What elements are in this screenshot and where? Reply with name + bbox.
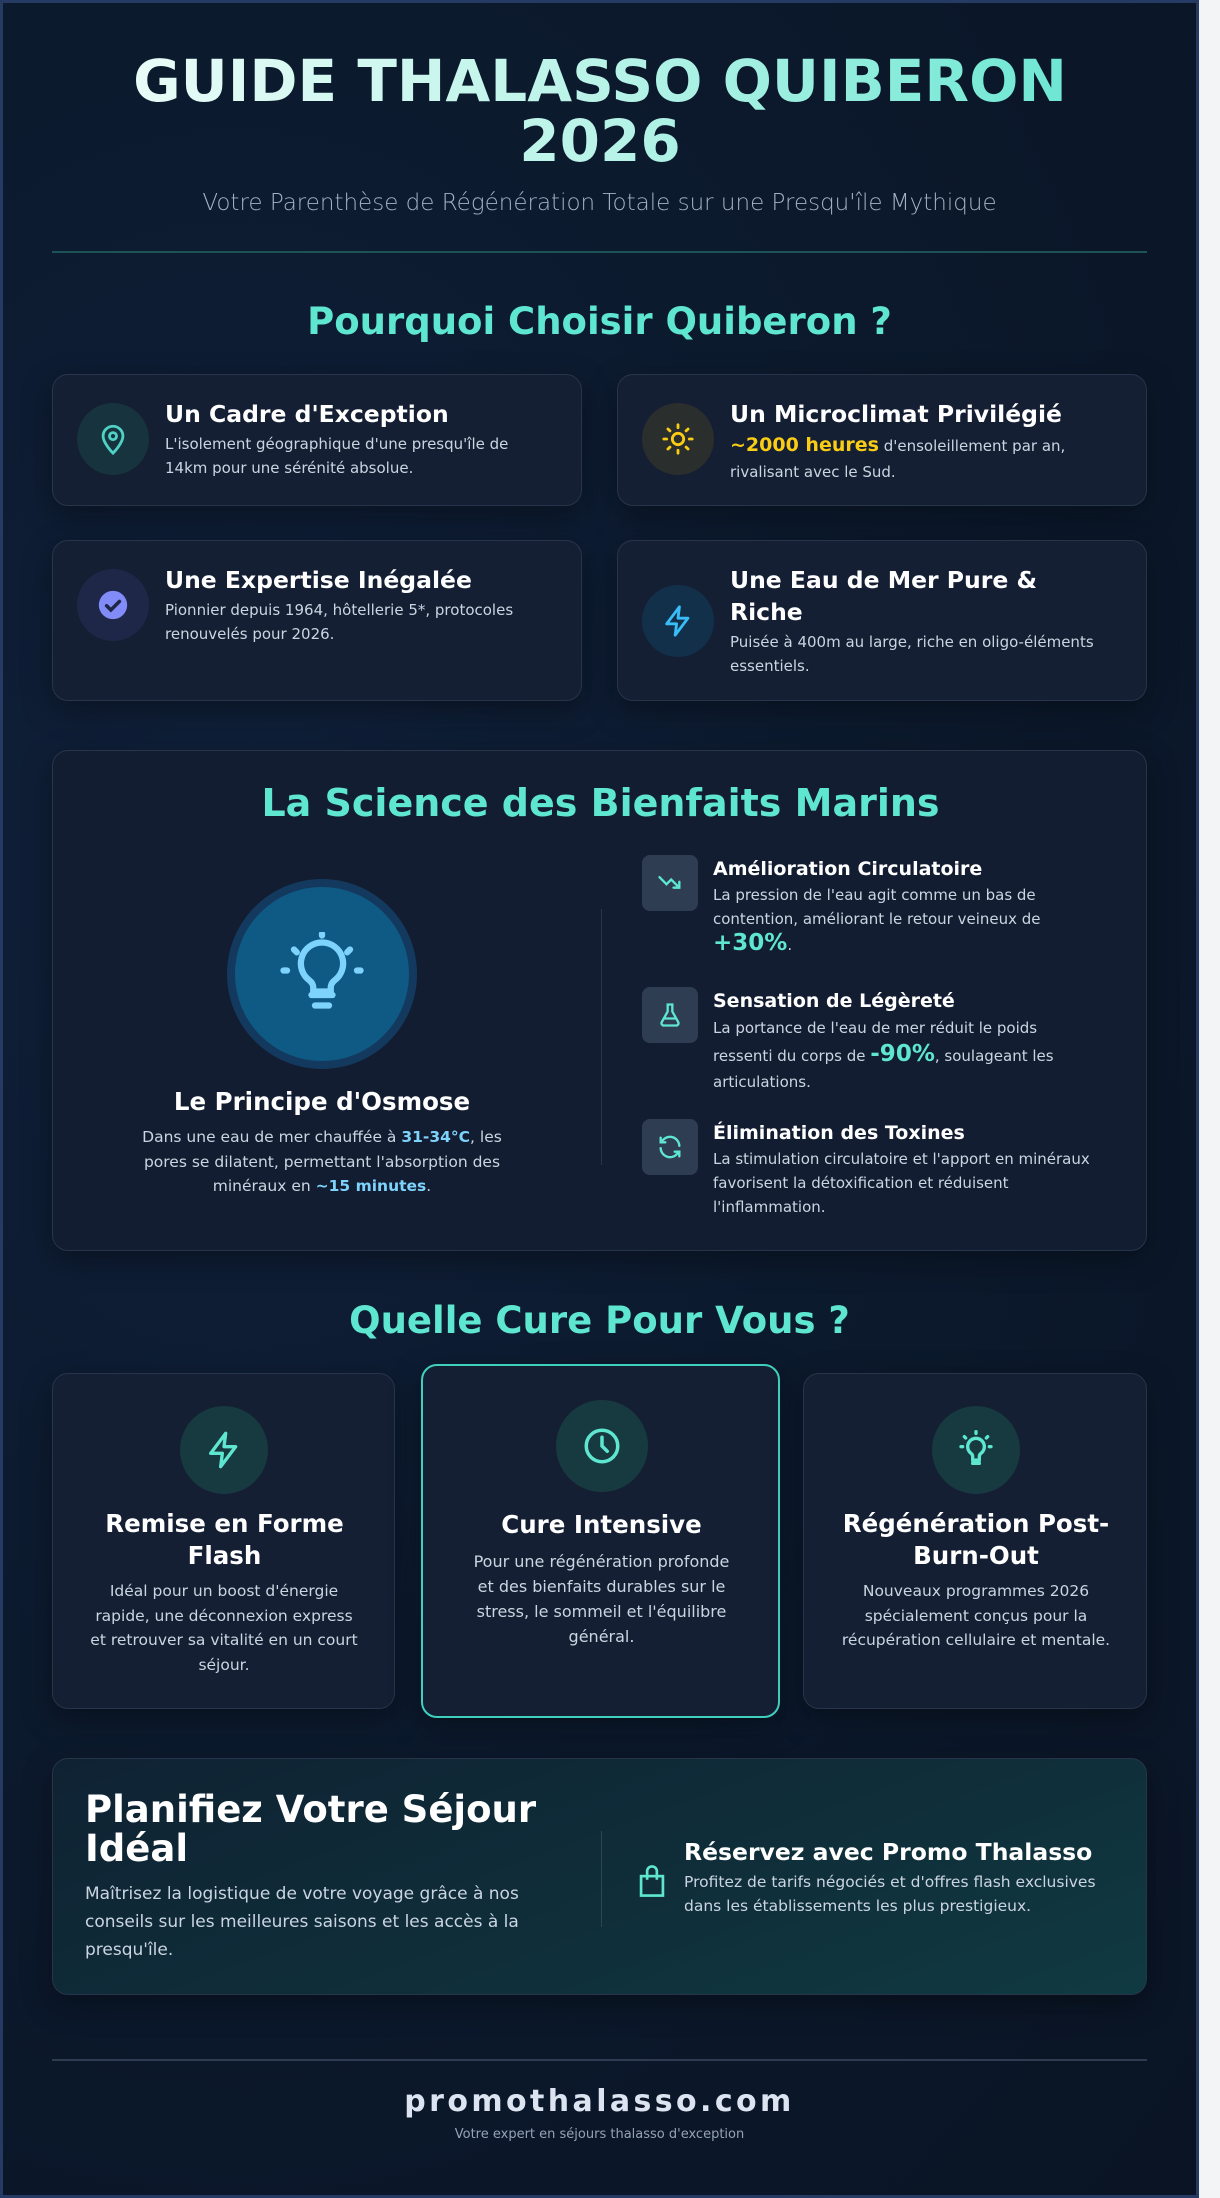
card: flash [52, 1373, 395, 1709]
icon: bulb [932, 1406, 1020, 1494]
title [60, 51, 1140, 171]
cta right: Réservez avec Promo Thalasso [684, 1838, 1092, 1866]
card: intensive [421, 1364, 780, 1718]
card: expertise [52, 540, 582, 701]
icon: sun [642, 403, 714, 475]
item: legerete: La portance de l'eau de mer réduit le poids ressenti du corps de -90%, soulageant les articulations. [713, 1019, 1054, 1091]
cta right: Profitez de tarifs négociés et d'offres flash exclusives dans les établissements les plus prestigieux. [684, 1873, 1096, 1915]
card: cadre: L'isolement géographique d'une presqu'île de 14km pour une sérénité absolue. [165, 435, 508, 477]
text: Un Cadre d'Exception [165, 400, 449, 428]
panel: cta [52, 1758, 1147, 1995]
card: intensive: Cure Intensive [501, 1510, 702, 1539]
card: flash: Idéal pour un boost d'énergie rapide, une déconnexion express et retrouver sa vitalité en un court séjour. [90, 1582, 358, 1674]
icon: bolt [180, 1406, 268, 1494]
card: intensive: Pour une régénération profonde et des bienfaits durables sur le stress, le sommeil et l'équilibre général. [474, 1552, 729, 1646]
osmose text: Le Principe d'Osmose [174, 1087, 470, 1116]
item: toxines: La stimulation circulatoire et l'apport en minéraux favorisent la détoxification et réduisent l'inflammation. [713, 1150, 1090, 1216]
card: microclimat: ~2000 heures d'ensoleillement par an, rivalisant avec le Sud. [730, 434, 1065, 481]
cta left: Maîtrisez la logistique de votre voyage grâce à nos conseils sur les meilleures saisons et les accès à la presqu'île. [85, 1884, 519, 1960]
osmose text [142, 1087, 502, 1195]
subtitle: Votre Parenthèse de Régénération Totale sur une Presqu'île Mythique [202, 190, 997, 216]
text: Un Microclimat Privilégié [730, 400, 1062, 428]
item: circulatoire: La pression de l'eau agit comme un bas de contention, améliorant le retour veineux de +30%. [713, 886, 1041, 956]
item: legerete [642, 987, 1054, 1091]
item: toxines [642, 1119, 1090, 1216]
card: burn-out [803, 1373, 1147, 1709]
icon: bag [640, 1865, 664, 1897]
cta left: Planifiez Votre Séjour Idéal [85, 1788, 536, 1870]
icon: bulb circle [227, 879, 417, 1069]
item: toxines: Élimination des Toxines [713, 1122, 965, 1144]
item: legerete: Sensation de Légèreté [713, 990, 955, 1012]
icon: pin [77, 403, 149, 475]
footer [404, 2084, 795, 2142]
icon: bolt [642, 585, 714, 657]
heading: cure: Quelle Cure Pour Vous ? [349, 1299, 850, 1342]
card: burn-out: Nouveaux programmes 2026 spécialement conçus pour la récupération cellulaire et mentale. [842, 1582, 1110, 1649]
cta right [640, 1838, 1096, 1915]
card: eau [617, 540, 1147, 701]
panel: science [52, 750, 1147, 1251]
title: GUIDE THALASSO QUIBERON [133, 47, 1067, 115]
title: 2026 [519, 107, 681, 175]
osmose text: Dans une eau de mer chauffée à 31-34°C, les pores se dilatent, permettant l'absorption des minéraux en ~15 minutes. [142, 1128, 502, 1195]
footer: Votre expert en séjours thalasso d'exception [455, 2127, 744, 2142]
text: Une Eau de Mer Pure & Riche [730, 566, 1037, 626]
card: burn-out: Régénération Post-Burn-Out [843, 1509, 1109, 1570]
card: expertise: Pionnier depuis 1964, hôtellerie 5*, protocoles renouvelés pour 2026. [165, 601, 513, 643]
icon: clock [556, 1400, 648, 1492]
card: microclimat [617, 374, 1147, 506]
text: Une Expertise Inégalée [165, 566, 472, 594]
cta left [85, 1788, 536, 1960]
item: circulatoire [642, 855, 1041, 956]
item: circulatoire: Amélioration Circulatoire [713, 858, 982, 880]
card: cadre [52, 374, 582, 506]
card: flash: Remise en Forme Flash [105, 1509, 344, 1570]
heading: pourquoi: Pourquoi Choisir Quiberon ? [307, 300, 892, 343]
card: eau: Puisée à 400m au large, riche en oligo-éléments essentiels. [730, 633, 1094, 675]
heading: La Science des Bienfaits Marins [261, 781, 940, 825]
icon: check [77, 569, 149, 641]
footer: promothalasso.com [404, 2084, 795, 2119]
